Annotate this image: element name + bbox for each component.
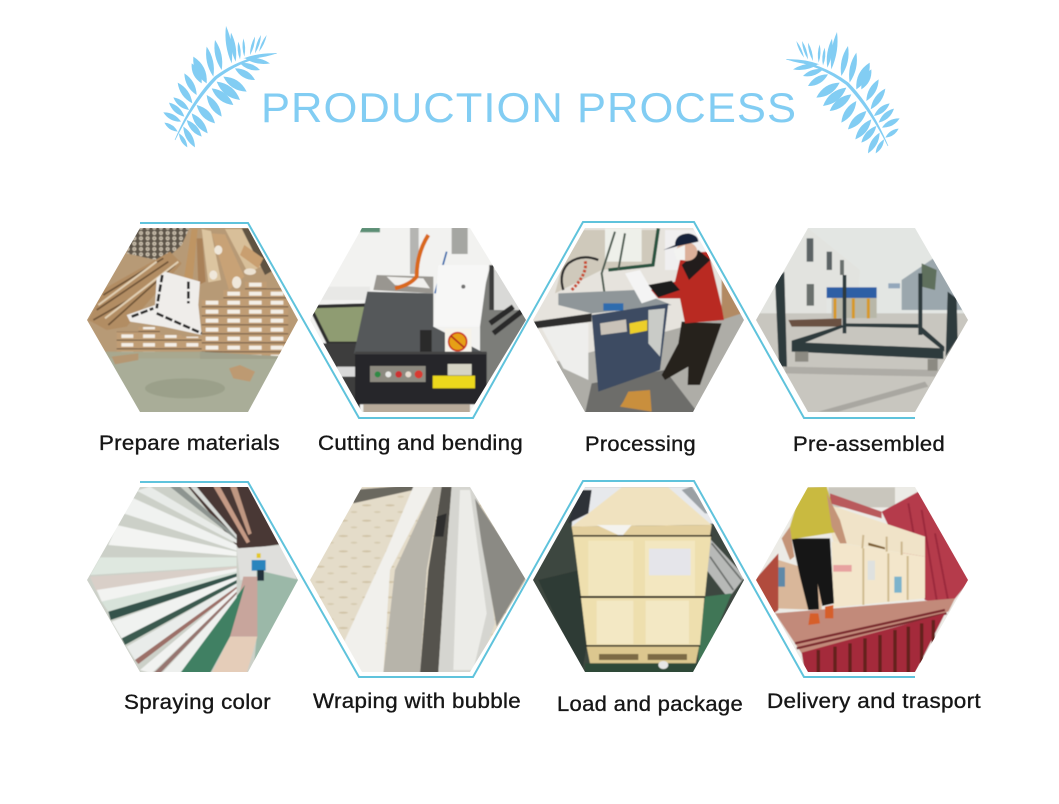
- panel: spraying color: [80, 483, 307, 714]
- label: Spraying color: [124, 691, 271, 714]
- hexagon outline: bottom row: [140, 481, 915, 677]
- photo: bubble-wrapped profiles: [307, 483, 533, 677]
- title: PRODUCTION PROCESS: [261, 84, 797, 131]
- photo: loading crates into container: [756, 487, 968, 672]
- icon: left palm leaf: [162, 26, 277, 149]
- panel: cutting and bending: [307, 223, 533, 455]
- panel: processing: [525, 223, 752, 456]
- photo: stacked materials: [85, 225, 302, 418]
- label: Pre-assembled: [793, 433, 945, 456]
- label: Wraping with bubble: [313, 690, 521, 713]
- label: Cutting and bending: [318, 432, 523, 455]
- label: Processing: [585, 433, 696, 456]
- photo: steel frame in yard: [756, 228, 968, 412]
- panel: pre-assembled: [756, 228, 968, 452]
- label: Prepare materials: [99, 432, 280, 455]
- panel: load and package: [525, 483, 752, 716]
- photo: profiles on spray line: [87, 487, 298, 672]
- panel: delivery and trasport: [752, 483, 981, 713]
- label: Delivery and trasport: [767, 690, 981, 713]
- label: Load and package: [557, 693, 743, 716]
- photo: worker at machine: [533, 228, 744, 412]
- photo: wooden crate: [533, 487, 744, 672]
- panel: wraping with bubble: [307, 483, 533, 713]
- panel: prepare materials: [85, 225, 302, 455]
- photo: cutting machine: [307, 223, 533, 417]
- hexagon outline: top row: [140, 222, 915, 418]
- icon: right palm leaf: [786, 32, 901, 155]
